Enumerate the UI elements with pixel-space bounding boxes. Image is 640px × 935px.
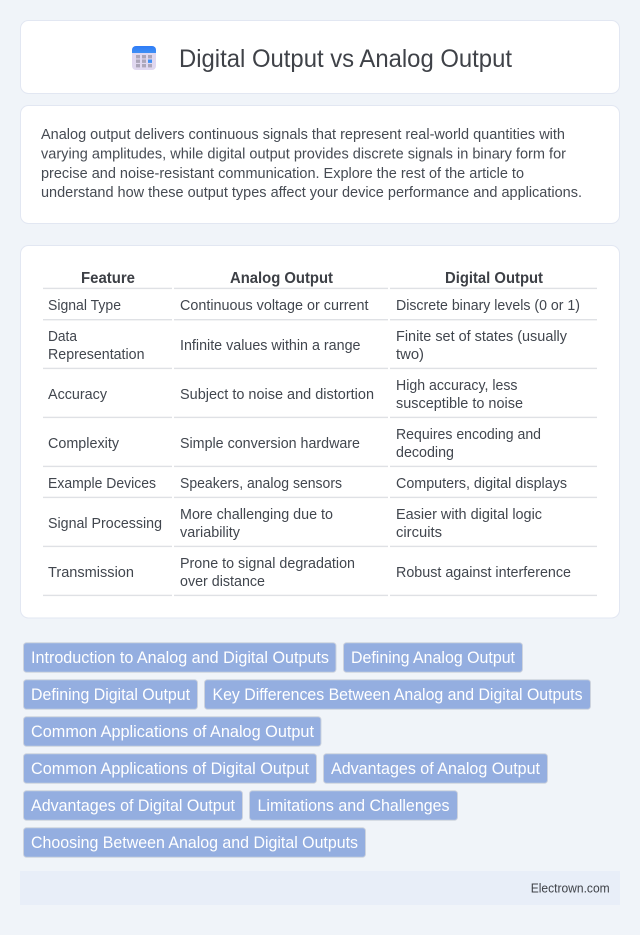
tag: Advantages of Digital Output	[31, 797, 235, 815]
row: example devices: Example Devices	[48, 476, 156, 492]
footer	[20, 871, 620, 905]
row: example devices	[48, 476, 567, 492]
row: data representation	[48, 329, 568, 363]
panel: header	[20, 20, 620, 94]
title: Digital Output vs Analog Output	[179, 45, 512, 73]
text block: intro paragraph: precise and noise-resistant communication. Explore the rest of the article to	[41, 166, 524, 182]
row: signal type: Discrete binary levels (0 or 1)	[396, 298, 580, 314]
text block: intro paragraph: varying amplitudes, while digital output provides discrete signals in binary form for	[41, 146, 566, 162]
tag	[24, 828, 366, 857]
row: transmission	[48, 556, 571, 590]
tag: Introduction to Analog and Digital Outputs	[31, 649, 329, 667]
tag	[24, 680, 198, 709]
row: signal processing: Easier with digital logic	[396, 507, 542, 523]
table header row	[81, 270, 544, 287]
tag: Limitations and Challenges	[258, 797, 450, 815]
row: data representation: Data	[48, 329, 77, 345]
tag	[24, 791, 242, 820]
tag	[24, 717, 321, 746]
table header row: Analog Output	[230, 270, 334, 287]
row: signal processing: Signal Processing	[48, 516, 162, 532]
row: signal processing: circuits	[396, 525, 442, 541]
text block: intro paragraph: Analog output delivers continuous signals that represent real-world quantities with	[41, 127, 565, 143]
row: accuracy: High accuracy, less	[396, 378, 518, 394]
tag: Common Applications of Analog Output	[31, 723, 314, 741]
icon: calendar grid	[132, 46, 156, 70]
row: signal type: Continuous voltage or current	[180, 298, 369, 314]
row: signal processing: variability	[180, 525, 241, 541]
row: complexity: Requires encoding and	[396, 427, 541, 443]
row: data representation: Infinite values within a range	[180, 338, 361, 354]
table header row: Digital Output	[445, 270, 544, 287]
tag: Common Applications of Digital Output	[31, 760, 309, 778]
table header row: Feature	[81, 270, 135, 287]
text block: intro paragraph	[41, 127, 582, 201]
row: accuracy: Accuracy	[48, 387, 108, 403]
row: complexity: Complexity	[48, 436, 120, 452]
row: signal processing: More challenging due to	[180, 507, 333, 523]
row: accuracy: susceptible to noise	[396, 396, 523, 412]
row: data representation: two)	[396, 347, 424, 363]
row: complexity	[48, 427, 541, 461]
tag	[344, 643, 522, 672]
row: signal processing	[48, 507, 542, 541]
row: signal type	[48, 298, 580, 314]
panel: topic tags	[24, 643, 590, 857]
row: example devices: Computers, digital displays	[396, 476, 567, 492]
row: accuracy	[48, 378, 523, 412]
row: transmission: Robust against interference	[396, 565, 571, 581]
row: data representation: Representation	[48, 347, 145, 363]
panel: comparison table	[20, 246, 620, 618]
tag	[204, 680, 590, 709]
row: transmission: Transmission	[48, 565, 134, 581]
tag: Advantages of Analog Output	[331, 760, 540, 778]
row: accuracy: Subject to noise and distortion	[180, 387, 374, 403]
tag	[324, 754, 548, 783]
row: complexity: Simple conversion hardware	[180, 436, 360, 452]
text block: intro paragraph: understand how these output types affect your device performance and applications.	[41, 185, 582, 201]
row: data representation: Finite set of states (usually	[396, 329, 568, 345]
row: transmission: over distance	[180, 574, 265, 590]
tag	[24, 754, 316, 783]
row: signal type: Signal Type	[48, 298, 121, 314]
footer credit: Electrown.com	[531, 882, 610, 896]
tag	[250, 791, 458, 820]
tag: Key Differences Between Analog and Digital Outputs	[212, 686, 582, 704]
row: example devices: Speakers, analog sensors	[180, 476, 342, 492]
tag: Defining Digital Output	[31, 686, 190, 704]
tag	[24, 643, 336, 672]
panel: introduction	[20, 106, 620, 224]
row: complexity: decoding	[396, 445, 454, 461]
tag: Defining Analog Output	[351, 649, 515, 667]
row: transmission: Prone to signal degradation	[180, 556, 355, 572]
tag: Choosing Between Analog and Digital Outputs	[31, 834, 358, 852]
